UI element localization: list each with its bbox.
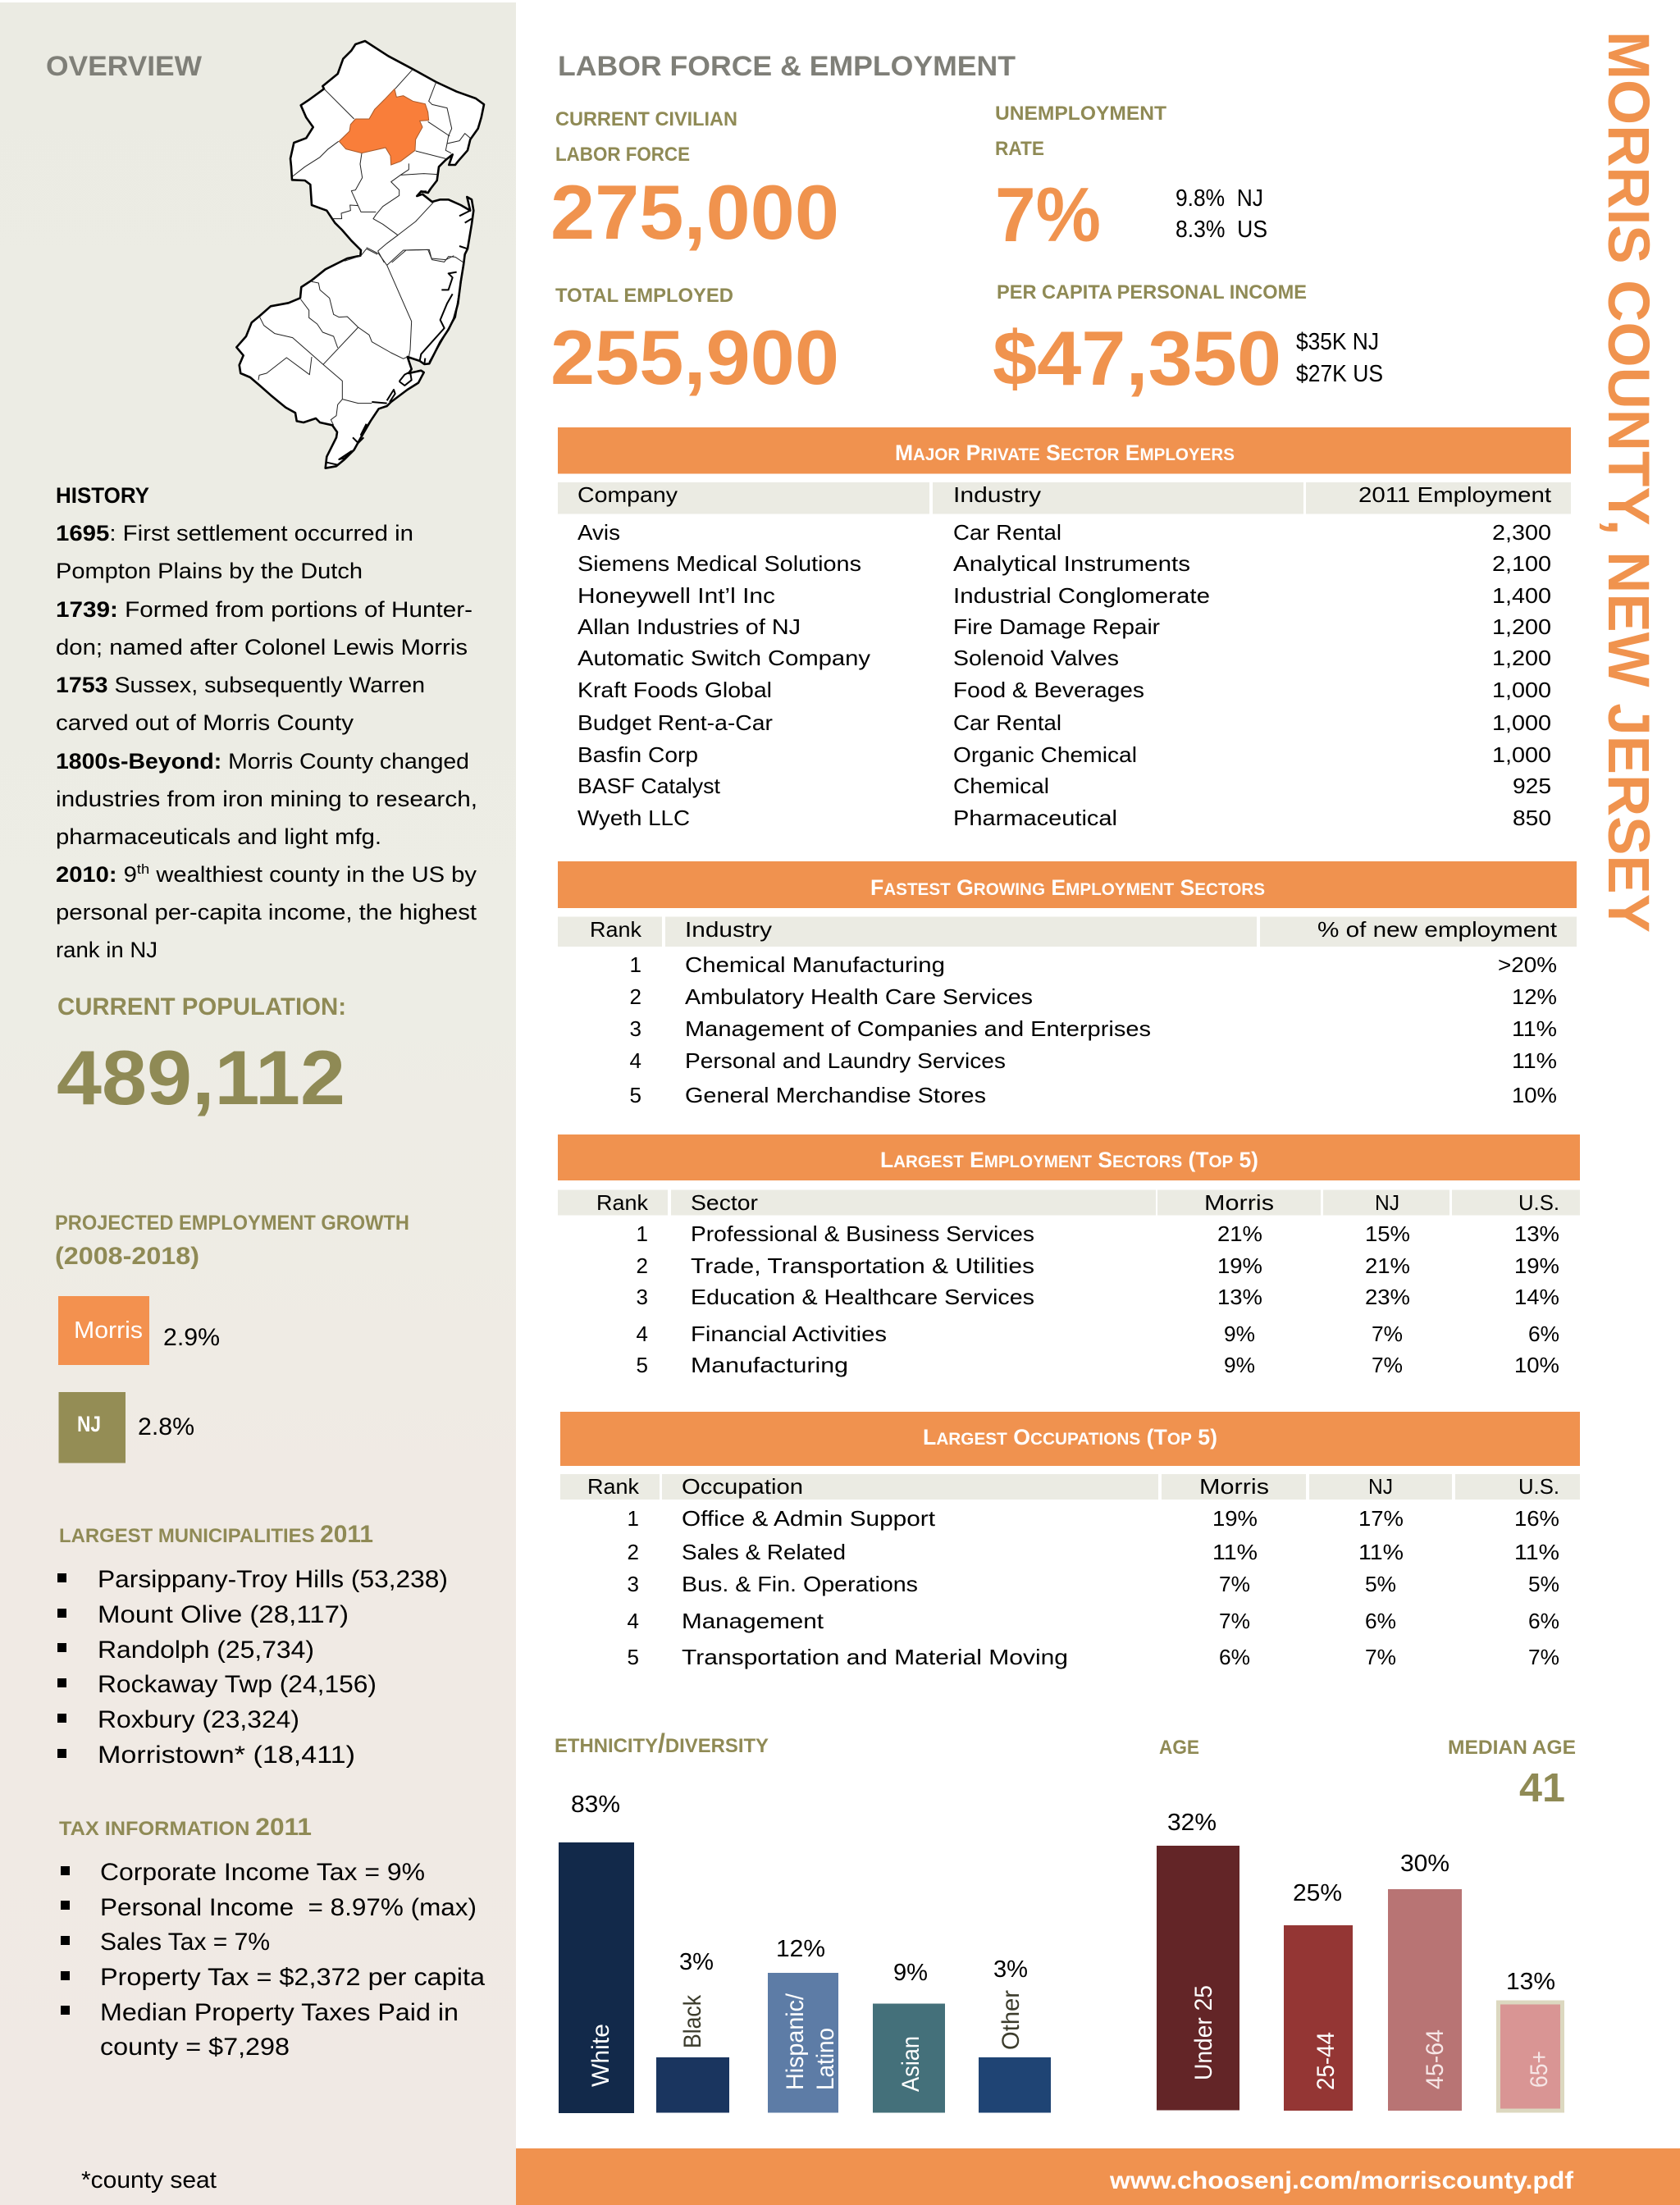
stat: unemployment rate: RATE — [995, 138, 1044, 160]
bar chart: ethnicity and diversity: Asian — [897, 2036, 924, 2092]
table: major private sector employers: Car Rental — [953, 710, 1061, 735]
table: major private sector employers: 1,200 — [1492, 646, 1551, 670]
table: largest employment sectors: 21% — [1217, 1221, 1262, 1246]
table: largest occupations: 19% — [1212, 1506, 1258, 1531]
table: largest occupations: 1 — [628, 1506, 639, 1531]
table: major private sector employers: Avis — [578, 520, 620, 545]
table: fastest growing employment sectors: 10% — [1512, 1083, 1557, 1107]
text block: history: industries from iron mining to research, — [56, 787, 477, 811]
list: largest municipalities — [57, 1521, 448, 1769]
text block: history: pharmaceuticals and light mfg. — [56, 824, 381, 849]
stat: median age — [1448, 1737, 1576, 1810]
table: largest occupations: Rank — [587, 1474, 640, 1499]
table: largest occupations: NJ — [1368, 1474, 1393, 1499]
table: fastest growing employment sectors: 3 — [630, 1016, 641, 1041]
table: largest employment sectors: Manufacturing — [691, 1353, 848, 1377]
table: fastest growing employment sectors: Chemical Manufacturing — [685, 952, 945, 977]
table: largest occupations: LARGEST OCCUPATIONS (TOP 5) — [923, 1425, 1217, 1449]
table: major private sector employers: Siemens Medical Solutions — [578, 551, 861, 576]
table: largest occupations: 2 — [628, 1540, 639, 1564]
table: largest occupations: Morris — [1199, 1474, 1269, 1499]
stat: current population: CURRENT POPULATION: — [57, 993, 346, 1020]
table: largest occupations: Sales & Related — [682, 1540, 846, 1564]
list: tax information: county = $7,298 — [100, 2034, 290, 2061]
table: fastest growing employment sectors: Rank — [590, 917, 642, 942]
table: fastest growing employment sectors: 4 — [630, 1048, 641, 1073]
bar chart: age — [1157, 1737, 1562, 2111]
table: fastest growing employment sectors: 5 — [630, 1083, 641, 1107]
chart: projected employment growth — [55, 1212, 409, 1463]
table: largest occupations: 6% — [1365, 1609, 1396, 1633]
table: largest occupations: 3 — [628, 1572, 639, 1596]
table: largest employment sectors: 7% — [1372, 1322, 1403, 1346]
bar chart: ethnicity and diversity: ETHNICITY/DIVERSITY — [555, 1728, 769, 1758]
stat: unemployment rate: UNEMPLOYMENT — [995, 103, 1166, 125]
table: largest employment sectors: 1 — [637, 1221, 648, 1246]
bar chart: ethnicity and diversity — [555, 1728, 1051, 2113]
table: major private sector employers: Company — [578, 482, 678, 507]
text block: history: 1753 Sussex, subsequently Warren — [56, 673, 425, 697]
table: largest occupations: U.S. — [1518, 1474, 1559, 1499]
list: largest municipalities: Mount Olive (28,117) — [98, 1601, 349, 1628]
table: major private sector employers: 1,000 — [1492, 678, 1551, 702]
chart: projected employment growth: (2008-2018) — [55, 1243, 199, 1270]
table: largest occupations: 5% — [1528, 1572, 1559, 1596]
table: fastest growing employment sectors — [558, 861, 1577, 1107]
bar chart: ethnicity and diversity: 3% — [679, 1949, 714, 1975]
list: tax information: Corporate Income Tax = 9% — [100, 1859, 425, 1886]
heading: labor force and employment: LABOR FORCE & EMPLOYMENT — [558, 51, 1016, 82]
table: largest employment sectors: Morris — [1204, 1190, 1274, 1215]
bar chart: ethnicity and diversity: Other — [998, 1990, 1025, 2050]
text block: history: th — [137, 861, 149, 877]
table: largest occupations: 7% — [1219, 1609, 1250, 1633]
table: major private sector employers — [558, 427, 1571, 830]
table: major private sector employers: 1,000 — [1492, 710, 1551, 735]
text block: history: 2010: 9 — [56, 862, 135, 887]
table: major private sector employers: Budget Rent-a-Car — [578, 710, 773, 735]
table: major private sector employers: 2,100 — [1492, 551, 1551, 576]
stat: total employed: TOTAL EMPLOYED — [555, 285, 733, 307]
list: largest municipalities: Morristown* (18,411) — [98, 1742, 355, 1769]
text block: history — [56, 483, 477, 962]
footnote: county seat: *county seat — [81, 2167, 217, 2194]
text block: history: carved out of Morris County — [56, 710, 354, 735]
list: tax information: Property Tax = $2,372 per capita — [100, 1964, 485, 1991]
table: major private sector employers: Car Rental — [953, 520, 1061, 545]
bar chart: ethnicity and diversity: Hispanic/ — [782, 1993, 809, 2090]
stat: unemployment rate: 7% — [995, 171, 1101, 258]
chart: projected employment growth: 2.8% — [138, 1413, 194, 1440]
table: largest employment sectors: 19% — [1217, 1253, 1262, 1278]
table: largest employment sectors: 21% — [1365, 1253, 1410, 1278]
table: major private sector employers: Fire Damage Repair — [953, 614, 1160, 639]
table: largest occupations: 5 — [628, 1645, 639, 1669]
bar chart: age: 32% — [1167, 1810, 1217, 1836]
table: major private sector employers: Organic Chemical — [953, 742, 1137, 767]
stat: unemployment rate: 8.3% US — [1176, 217, 1267, 243]
bar chart: age: AGE — [1159, 1737, 1199, 1759]
map: New Jersey counties with Morris highlighted — [236, 41, 484, 468]
table: largest occupations: 7% — [1365, 1645, 1396, 1669]
table: largest occupations: 5% — [1365, 1572, 1396, 1596]
table: major private sector employers: Allan Industries of NJ — [578, 614, 801, 639]
table: major private sector employers: Solenoid Valves — [953, 646, 1119, 670]
table: largest employment sectors: 15% — [1365, 1221, 1410, 1246]
stat: civilian labor force: CURRENT CIVILIAN — [555, 108, 737, 130]
list: tax information: TAX INFORMATION 2011 — [59, 1814, 312, 1841]
bar chart: age: Under 25 — [1190, 1985, 1217, 2080]
table: major private sector employers: 1,400 — [1492, 583, 1551, 608]
stat: civilian labor force: LABOR FORCE — [555, 144, 690, 166]
chart: projected employment growth: 2.9% — [163, 1324, 220, 1351]
bar chart: age: 30% — [1400, 1851, 1449, 1877]
chart: projected employment growth: NJ — [77, 1412, 101, 1436]
table: largest occupations: 4 — [628, 1609, 639, 1633]
table: major private sector employers: Food & Beverages — [953, 678, 1144, 702]
vertical title: MORRIS COUNTY, NEW JERSEY — [1596, 31, 1660, 933]
bar chart: ethnicity and diversity: 9% — [893, 1960, 928, 1986]
bar chart: age: 25-44 — [1312, 2032, 1340, 2090]
table: largest employment sectors: 13% — [1514, 1221, 1559, 1246]
footer band with url: www.choosenj.com/morriscounty.pdf — [1109, 2167, 1574, 2194]
list: largest municipalities: Randolph (25,734) — [98, 1637, 314, 1664]
list: largest municipalities: Roxbury (23,324) — [98, 1706, 299, 1733]
table: fastest growing employment sectors: >20% — [1498, 952, 1557, 977]
table: fastest growing employment sectors: 1 — [630, 952, 641, 977]
table: largest employment sectors: 6% — [1528, 1322, 1559, 1346]
bar chart: ethnicity and diversity: 3% — [993, 1956, 1028, 1983]
table: largest occupations: Management — [682, 1609, 824, 1633]
text block: history: Pompton Plains by the Dutch — [56, 559, 363, 583]
table: largest employment sectors: 10% — [1514, 1353, 1559, 1377]
table: fastest growing employment sectors: FASTEST GROWING EMPLOYMENT SECTORS — [870, 875, 1265, 900]
list: tax information — [59, 1814, 485, 2061]
table: largest employment sectors: Education & Healthcare Services — [691, 1285, 1034, 1309]
stat: civilian labor force: 275,000 — [550, 169, 839, 255]
table: largest employment sectors: 19% — [1514, 1253, 1559, 1278]
table: largest employment sectors: 4 — [637, 1322, 648, 1346]
stat: median age: 41 — [1519, 1766, 1565, 1810]
table: major private sector employers: Industrial Conglomerate — [953, 583, 1210, 608]
table: fastest growing employment sectors: General Merchandise Stores — [685, 1083, 986, 1107]
table: major private sector employers: 2011 Employment — [1358, 482, 1552, 507]
list: tax information: Sales Tax = 7% — [100, 1929, 270, 1956]
stat: per capita personal income: $47,350 — [993, 315, 1281, 401]
table: largest employment sectors: U.S. — [1518, 1190, 1559, 1215]
table: largest occupations — [560, 1412, 1580, 1669]
table: major private sector employers: Basfin Corp — [578, 742, 698, 767]
stat: current population — [57, 993, 346, 1121]
table: largest employment sectors: Trade, Transportation & Utilities — [691, 1253, 1034, 1278]
stat: total employed: 255,900 — [550, 314, 839, 400]
table: fastest growing employment sectors: Management of Companies and Enterprises — [685, 1016, 1151, 1041]
table: largest occupations: 11% — [1514, 1540, 1559, 1564]
table: largest employment sectors: 2 — [637, 1253, 648, 1278]
table: largest occupations: 6% — [1219, 1645, 1250, 1669]
text block: history: rank in NJ — [56, 938, 158, 962]
chart: projected employment growth: Morris — [74, 1317, 143, 1344]
stat: current population: 489,112 — [57, 1034, 345, 1121]
table: major private sector employers: 2,300 — [1492, 520, 1551, 545]
table: largest employment sectors: Rank — [596, 1190, 649, 1215]
bar chart: ethnicity and diversity: Latino — [812, 2028, 839, 2090]
stat: unemployment rate: 9.8% NJ — [1176, 185, 1263, 212]
table: major private sector employers: MAJOR PRIVATE SECTOR EMPLOYERS — [895, 441, 1235, 465]
stat: unemployment rate — [995, 103, 1267, 258]
table: largest occupations: 6% — [1528, 1609, 1559, 1633]
table: fastest growing employment sectors: 12% — [1512, 984, 1557, 1009]
table: largest employment sectors: LARGEST EMPLOYMENT SECTORS (TOP 5) — [880, 1148, 1258, 1172]
bar chart: age: 65+ — [1526, 2051, 1553, 2088]
table: major private sector employers: 1,000 — [1492, 742, 1551, 767]
table: largest occupations: 7% — [1219, 1572, 1250, 1596]
table: fastest growing employment sectors: Personal and Laundry Services — [685, 1048, 1006, 1073]
panel: overview sidebar — [0, 2, 516, 2205]
table: major private sector employers: 850 — [1513, 806, 1551, 830]
table: largest employment sectors: 3 — [637, 1285, 648, 1309]
table: largest employment sectors: 23% — [1365, 1285, 1410, 1309]
table: fastest growing employment sectors: Ambulatory Health Care Services — [685, 984, 1033, 1009]
stat: per capita personal income: $35K NJ — [1296, 329, 1379, 355]
bar chart: age: 25% — [1293, 1880, 1342, 1906]
footer band with url — [516, 2148, 1680, 2205]
table: largest employment sectors: 5 — [637, 1353, 648, 1377]
bar chart: age: 13% — [1506, 1969, 1555, 1995]
table: largest employment sectors: Professional & Business Services — [691, 1221, 1034, 1246]
table: largest employment sectors: 7% — [1372, 1353, 1403, 1377]
table: largest occupations: Occupation — [682, 1474, 803, 1499]
list: largest municipalities: LARGEST MUNICIPALITIES 2011 — [59, 1521, 373, 1548]
list: largest municipalities: Rockaway Twp (24,156) — [98, 1671, 377, 1698]
stat: civilian labor force — [550, 108, 839, 255]
bar chart: ethnicity and diversity: 12% — [776, 1936, 825, 1962]
table: largest occupations: 11% — [1212, 1540, 1258, 1564]
text block: history: 1695: First settlement occurred in — [56, 521, 413, 546]
table: fastest growing employment sectors: 11% — [1512, 1016, 1557, 1041]
table: largest occupations: 11% — [1358, 1540, 1404, 1564]
table: major private sector employers: Wyeth LLC — [578, 806, 690, 830]
bar chart: ethnicity and diversity: 83% — [571, 1792, 620, 1818]
stat: per capita personal income: PER CAPITA PERSONAL INCOME — [997, 281, 1307, 304]
table: largest employment sectors: 9% — [1224, 1322, 1255, 1346]
table: largest employment sectors — [558, 1134, 1580, 1377]
table: largest employment sectors: 13% — [1217, 1285, 1262, 1309]
table: largest employment sectors: Sector — [691, 1190, 758, 1215]
table: major private sector employers: BASF Catalyst — [578, 774, 721, 798]
stat: median age: MEDIAN AGE — [1448, 1737, 1576, 1759]
table: major private sector employers: Chemical — [953, 774, 1049, 798]
table: largest occupations: 16% — [1514, 1506, 1559, 1531]
table: major private sector employers: Industry — [953, 482, 1041, 507]
text block: history: 1739: Formed from portions of Hunter- — [56, 597, 472, 622]
table: major private sector employers: 1,200 — [1492, 614, 1551, 639]
text block: history: 1800s-Beyond: Morris County changed — [56, 749, 469, 774]
table: fastest growing employment sectors: Industry — [685, 917, 772, 942]
table: largest occupations: Office & Admin Support — [682, 1506, 936, 1531]
text block: history: personal per-capita income, the highest — [56, 900, 477, 924]
list: tax information: Personal Income = 8.97% (max) — [100, 1894, 477, 1921]
table: largest employment sectors: NJ — [1375, 1190, 1399, 1215]
table: largest occupations: 7% — [1528, 1645, 1559, 1669]
list: tax information: Median Property Taxes Paid in — [100, 1999, 459, 2026]
table: major private sector employers: Automatic Switch Company — [578, 646, 870, 670]
table: largest occupations: Bus. & Fin. Operations — [682, 1572, 918, 1596]
heading: overview: OVERVIEW — [46, 51, 203, 82]
table: largest occupations: 17% — [1358, 1506, 1404, 1531]
table: largest employment sectors: Financial Activities — [691, 1322, 887, 1346]
table: major private sector employers: Kraft Foods Global — [578, 678, 772, 702]
bar chart: ethnicity and diversity: White — [587, 2024, 614, 2087]
table: largest employment sectors: 14% — [1514, 1285, 1559, 1309]
chart: projected employment growth: PROJECTED EMPLOYMENT GROWTH — [55, 1212, 409, 1235]
list: largest municipalities: Parsippany-Troy Hills (53,238) — [98, 1566, 448, 1593]
stat: per capita personal income: $27K US — [1296, 361, 1383, 387]
table: major private sector employers: Analytical Instruments — [953, 551, 1190, 576]
bar chart: ethnicity and diversity: Black — [679, 1994, 706, 2048]
bar chart: age: 45-64 — [1422, 2029, 1449, 2089]
table: largest employment sectors: 9% — [1224, 1353, 1255, 1377]
table: fastest growing employment sectors: 11% — [1512, 1048, 1557, 1073]
table: major private sector employers: Honeywell Int’l Inc — [578, 583, 775, 608]
table: fastest growing employment sectors: 2 — [630, 984, 641, 1009]
table: largest occupations: Transportation and Material Moving — [682, 1645, 1068, 1669]
table: major private sector employers: 925 — [1513, 774, 1551, 798]
table: major private sector employers: Pharmaceutical — [953, 806, 1117, 830]
table: fastest growing employment sectors: % of new employment — [1317, 917, 1558, 942]
text block: history: wealthiest county in the US by — [149, 862, 477, 887]
stat: per capita personal income — [993, 281, 1383, 401]
text block: history: HISTORY — [56, 483, 149, 508]
text block: history: don; named after Colonel Lewis Morris — [56, 635, 468, 660]
